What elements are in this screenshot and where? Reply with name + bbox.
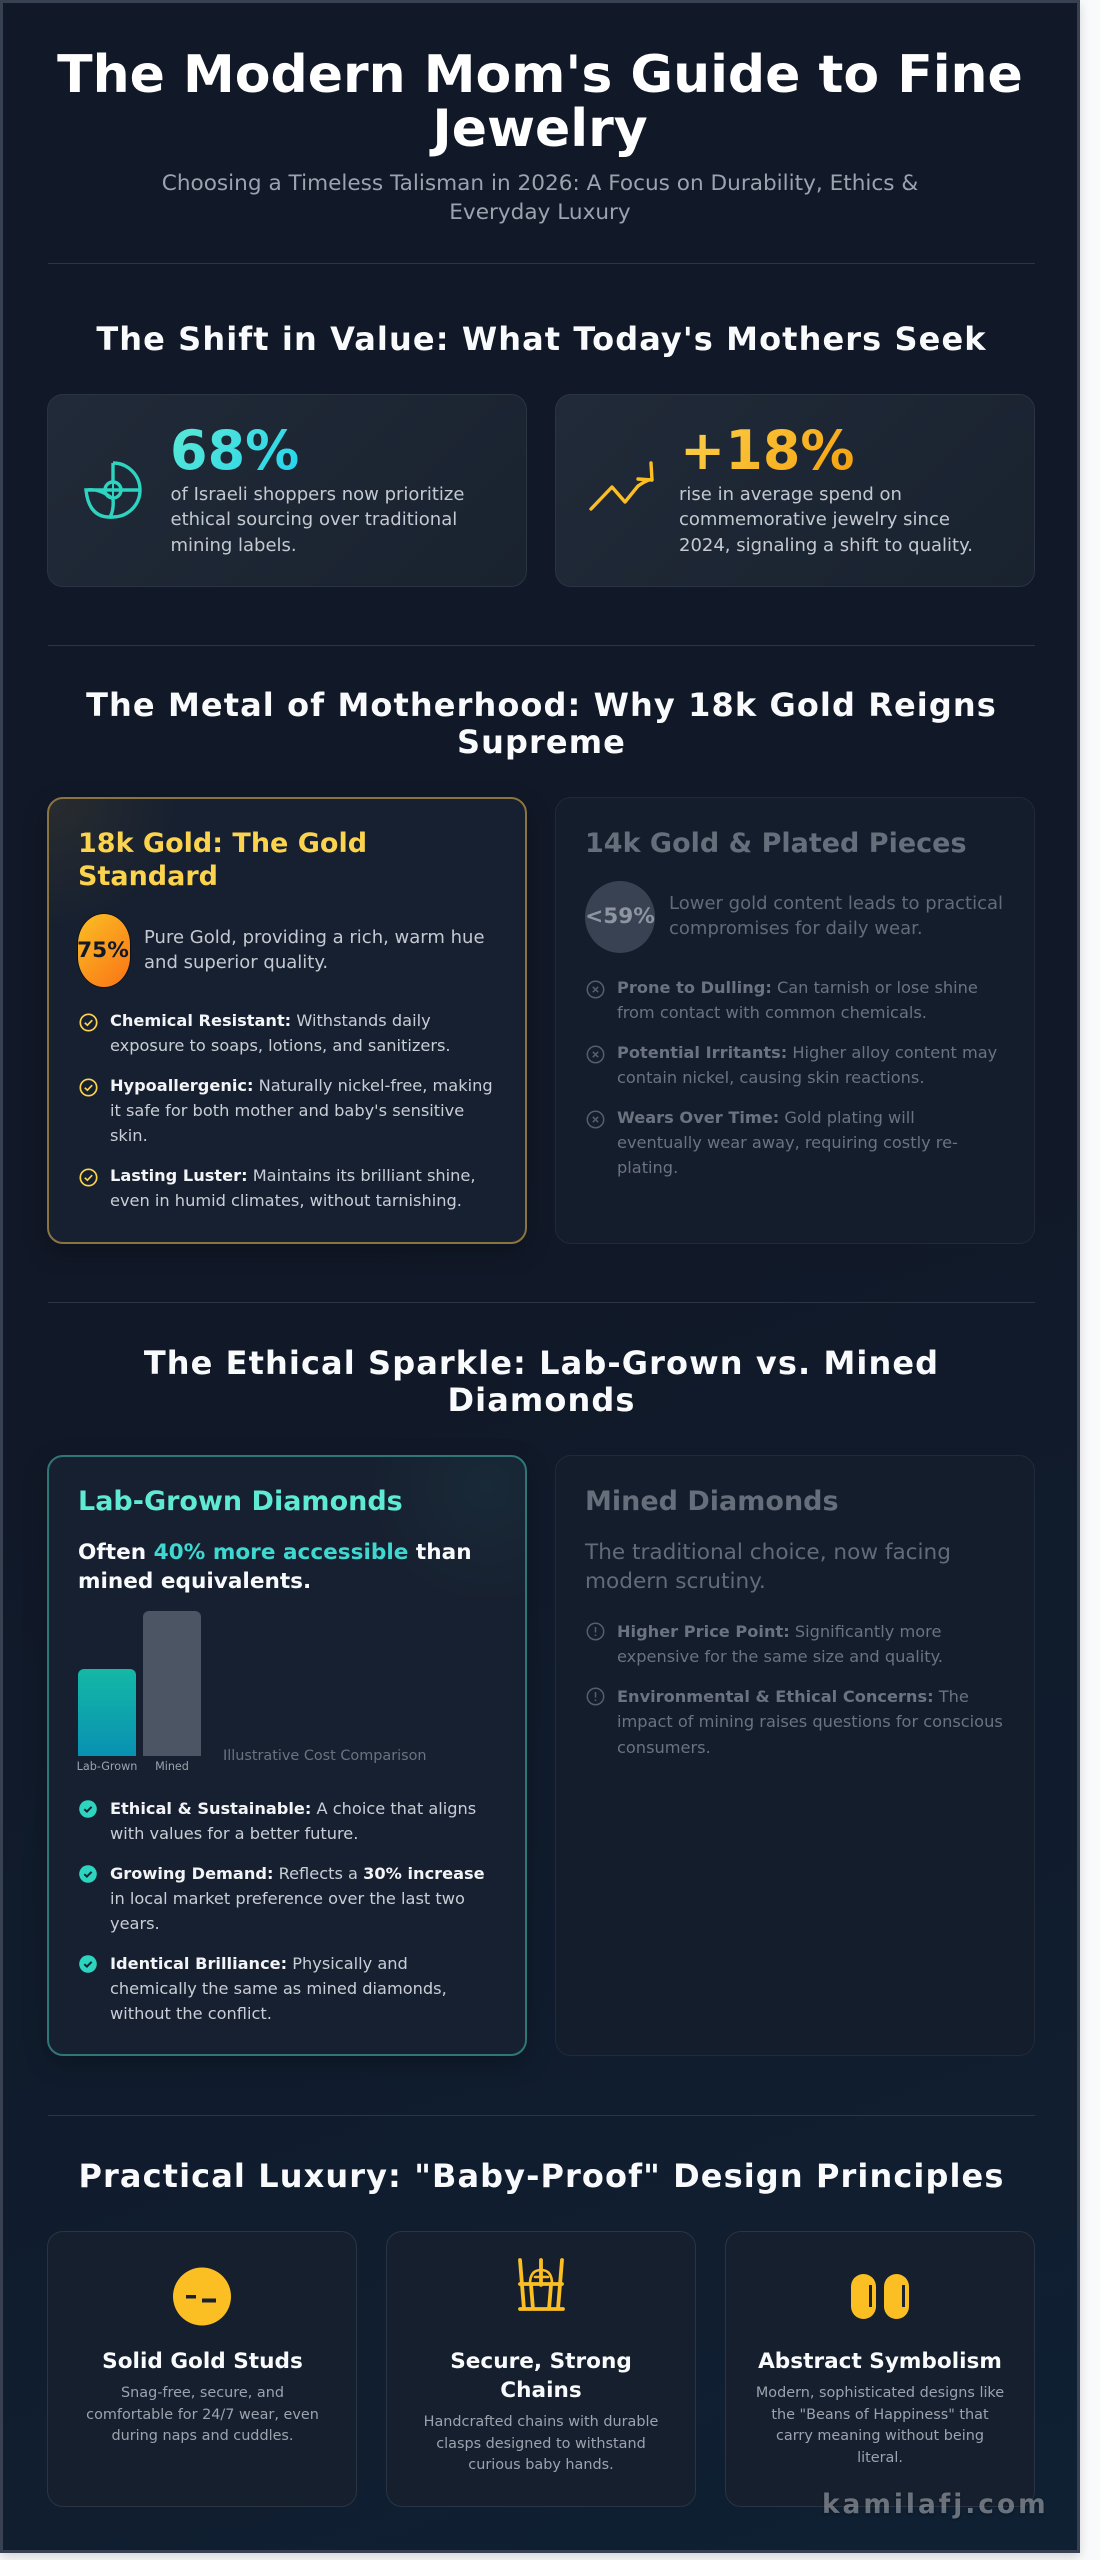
- item: ethical: [110, 1798, 476, 1843]
- title: [57, 45, 1023, 159]
- section heading: metal of motherhood: Supreme: [457, 723, 626, 761]
- subtitle: [162, 171, 918, 225]
- panel: chains: [386, 2231, 696, 2507]
- card text: studs: [48, 2383, 357, 2448]
- card text: studs: comfortable for 24/7 wear, even: [86, 2407, 319, 2423]
- card text: studs: Snag-free, secure, and: [121, 2385, 284, 2401]
- icon: alert: [586, 1622, 604, 1640]
- item: wears over time: [617, 1108, 958, 1177]
- icon: cross: [586, 1110, 604, 1128]
- item: hypoallergenic: skin.: [110, 1126, 148, 1145]
- section heading: ethical sparkle: Diamonds: [448, 1381, 636, 1419]
- item: lasting luster: [110, 1166, 476, 1210]
- card text: symbolism: literal.: [857, 2450, 903, 2466]
- text: traditional choice: modern scrutiny.: [585, 1569, 766, 1594]
- item: hypoallergenic: Hypoallergenic: Naturally nickel-free, making: [110, 1076, 493, 1094]
- item: hypoallergenic: [110, 1076, 493, 1145]
- badge: 75%: 75%: [77, 938, 129, 963]
- title: The Modern Mom's Guide to Fine: [57, 45, 1023, 105]
- card text: symbolism: Modern, sophisticated designs like: [756, 2385, 1004, 2401]
- stat text: ethical sourcing: of Israeli shoppers now prioritize: [170, 484, 464, 505]
- panel heading: 18k gold: 18k Gold: The Gold: [78, 828, 367, 859]
- title: Jewelry: [432, 99, 648, 159]
- list: lab-grown benefits: [79, 1798, 485, 2023]
- item: environmental: Environmental & Ethical Concerns: The: [617, 1687, 969, 1706]
- icon: check: [79, 1168, 98, 1186]
- item: chemical resistant: Chemical Resistant: Withstands daily: [110, 1010, 431, 1030]
- card text: chains: Handcrafted chains with durable: [424, 2414, 658, 2430]
- stat text: ethical sourcing: ethical sourcing over traditional: [170, 509, 457, 530]
- highlight text: 40% more accessible: Often 40% more accessible than: [78, 1540, 472, 1565]
- stat text: spend: commemorative jewelry since: [679, 509, 950, 530]
- panel heading: mined: Mined Diamonds: [585, 1486, 839, 1517]
- item: environmental: [617, 1687, 1003, 1757]
- item: growing demand: years.: [110, 1914, 160, 1933]
- icon: gold stud: [172, 2266, 232, 2328]
- stat text: spend: [679, 484, 973, 556]
- card title: studs: Solid Gold Studs: [102, 2349, 303, 2374]
- stat text: spend: rise in average spend on: [679, 484, 902, 505]
- badge: 75%: [78, 914, 130, 987]
- text: pure gold: Pure Gold, providing a rich, warm hue: [144, 927, 485, 948]
- icon: rising trend: [589, 461, 654, 511]
- text: lower gold content: compromises for daily wear.: [669, 918, 923, 939]
- item: environmental: consumers.: [617, 1738, 711, 1757]
- panel: studs: [47, 2231, 357, 2507]
- icon: filled check: [79, 1955, 97, 1973]
- text: traditional choice: The traditional choice, now facing: [585, 1540, 951, 1565]
- item: price: [617, 1622, 943, 1666]
- stat number: +18%: +18%: [680, 419, 854, 482]
- panel: 14k gold: [555, 797, 1035, 1244]
- item: dulling: from contact with common chemicals.: [617, 1003, 927, 1022]
- bar chart: cost comparison: [77, 1611, 427, 1773]
- card text: chains: clasps designed to withstand: [436, 2436, 646, 2452]
- item: ethical: with values for a better future.: [110, 1824, 358, 1843]
- section heading: ethical sparkle: The Ethical Sparkle: Lab-Grown vs. Mined: [144, 1344, 939, 1382]
- icon: cross: [586, 980, 604, 998]
- item: irritants: [617, 1042, 997, 1087]
- item: dulling: [617, 978, 978, 1022]
- section heading: metal of motherhood: [86, 686, 997, 761]
- section heading: ethical sparkle: [144, 1344, 939, 1419]
- subtitle: Choosing a Timeless Talisman in 2026: A Focus on Durability, Ethics &: [162, 171, 918, 196]
- bar: mined: [143, 1611, 201, 1756]
- text: lower gold content: Lower gold content leads to practical: [669, 893, 1003, 914]
- item: wears over time: eventually wear away, requiring costly re-: [617, 1133, 958, 1152]
- panel: 18k gold: [47, 797, 527, 1244]
- bar label: lab-grown: Lab-Grown: [77, 1760, 137, 1773]
- item: growing demand: [110, 1864, 485, 1933]
- item: chemical resistant: [110, 1010, 451, 1055]
- stat text: ethical sourcing: [170, 484, 464, 556]
- card title: chains: Secure, Strong: [450, 2349, 632, 2374]
- card text: studs: during naps and cuddles.: [111, 2428, 294, 2444]
- icon: alert: [586, 1688, 604, 1706]
- panel: +18% stat: [555, 394, 1035, 587]
- item: identical brilliance: [110, 1954, 447, 2023]
- subtitle: Everyday Luxury: [449, 200, 631, 225]
- panel heading: lab-grown: Lab-Grown Diamonds: [78, 1486, 403, 1517]
- card title: chains: [386, 2347, 696, 2405]
- card text: symbolism: carry meaning without being: [776, 2428, 984, 2444]
- panel heading: 14k gold: 14k Gold & Plated Pieces: [585, 828, 967, 859]
- item: wears over time: plating.: [617, 1158, 678, 1177]
- item: growing demand: Growing Demand: Reflects a 30% increase: [110, 1864, 485, 1882]
- item: environmental: impact of mining raises questions for conscious: [617, 1712, 1003, 1731]
- panel heading: 18k gold: [78, 828, 367, 892]
- panel: 68% stat: [47, 394, 527, 587]
- item: lasting luster: even in humid climates, without tarnishing.: [110, 1191, 462, 1210]
- icon: cross: [586, 1046, 604, 1064]
- item: identical brilliance: Identical Brilliance: Physically and: [110, 1954, 408, 1972]
- item: hypoallergenic: it safe for both mother and baby's sensitive: [110, 1101, 464, 1120]
- icon: check: [79, 1014, 98, 1032]
- panel: mined: [555, 1455, 1035, 2056]
- highlight text: 40% more accessible: [78, 1540, 472, 1594]
- icon: filled check: [79, 1800, 97, 1818]
- card text: chains: curious baby hands.: [468, 2457, 614, 2473]
- icon: check: [79, 1078, 98, 1096]
- bar: lab-grown: [78, 1669, 136, 1756]
- item: wears over time: Wears Over Time: Gold plating will: [617, 1108, 915, 1126]
- list: mined concerns: [586, 1622, 1003, 1757]
- section heading: shift in value: The Shift in Value: What Today's Mothers Seek: [96, 320, 987, 358]
- card title: chains: Chains: [500, 2378, 582, 2403]
- highlight text: 40% more accessible: mined equivalents.: [78, 1569, 311, 1594]
- text: pure gold: [144, 927, 485, 973]
- bar label: mined: Mined: [155, 1760, 189, 1773]
- item: identical brilliance: chemically the same as mined diamonds,: [110, 1979, 447, 1998]
- stat number: 68%: 68%: [170, 419, 299, 482]
- icon: beans: [850, 2273, 910, 2321]
- icon: filled check: [79, 1865, 97, 1883]
- badge: <59%: <59%: [585, 904, 655, 929]
- item: chemical resistant: exposure to soaps, lotions, and sanitizers.: [110, 1036, 451, 1055]
- card title: symbolism: Abstract Symbolism: [758, 2349, 1002, 2374]
- icon: chain: [515, 2256, 567, 2316]
- card text: chains: [386, 2412, 696, 2477]
- panel heading: 18k gold: Standard: [78, 861, 218, 892]
- item: growing demand: in local market preference over the last two: [110, 1889, 465, 1908]
- panel: symbolism: [725, 2231, 1035, 2507]
- panel: lab-grown: [47, 1455, 527, 2056]
- item: lasting luster: Lasting Luster: Maintains its brilliant shine,: [110, 1166, 476, 1184]
- text: traditional choice: [584, 1540, 951, 1594]
- section heading: metal of motherhood: The Metal of Motherhood: Why 18k Gold Reigns: [86, 686, 997, 724]
- stat text: spend: 2024, signaling a shift to quality.: [679, 535, 973, 556]
- text: lower gold content: [669, 893, 1003, 939]
- item: dulling: Prone to Dulling: Can tarnish or lose shine: [617, 978, 978, 996]
- stat text: ethical sourcing: mining labels.: [170, 535, 297, 556]
- list: gold benefits: [79, 1010, 493, 1210]
- chart caption: Illustrative Cost Comparison: [223, 1748, 427, 1764]
- section heading: practical luxury: Practical Luxury: "Baby-Proof" Design Principles: [78, 2157, 1004, 2195]
- item: price: Higher Price Point: Significantly more: [617, 1622, 941, 1641]
- list: plated drawbacks: [586, 978, 997, 1177]
- watermark: kamilafj.com: [822, 2489, 1049, 2520]
- icon: ethical sourcing: [84, 461, 142, 519]
- item: irritants: contain nickel, causing skin reactions.: [617, 1068, 924, 1087]
- text: pure gold: and superior quality.: [144, 952, 328, 973]
- card text: symbolism: [725, 2383, 1035, 2470]
- badge: <59%: [585, 881, 655, 953]
- card text: symbolism: the "Beans of Happiness" that: [771, 2407, 989, 2423]
- item: price: expensive for the same size and quality.: [617, 1647, 943, 1666]
- item: ethical: Ethical & Sustainable: A choice that aligns: [110, 1798, 476, 1818]
- item: identical brilliance: without the conflict.: [110, 2004, 272, 2023]
- item: irritants: Potential Irritants: Higher alloy content may: [617, 1042, 997, 1062]
